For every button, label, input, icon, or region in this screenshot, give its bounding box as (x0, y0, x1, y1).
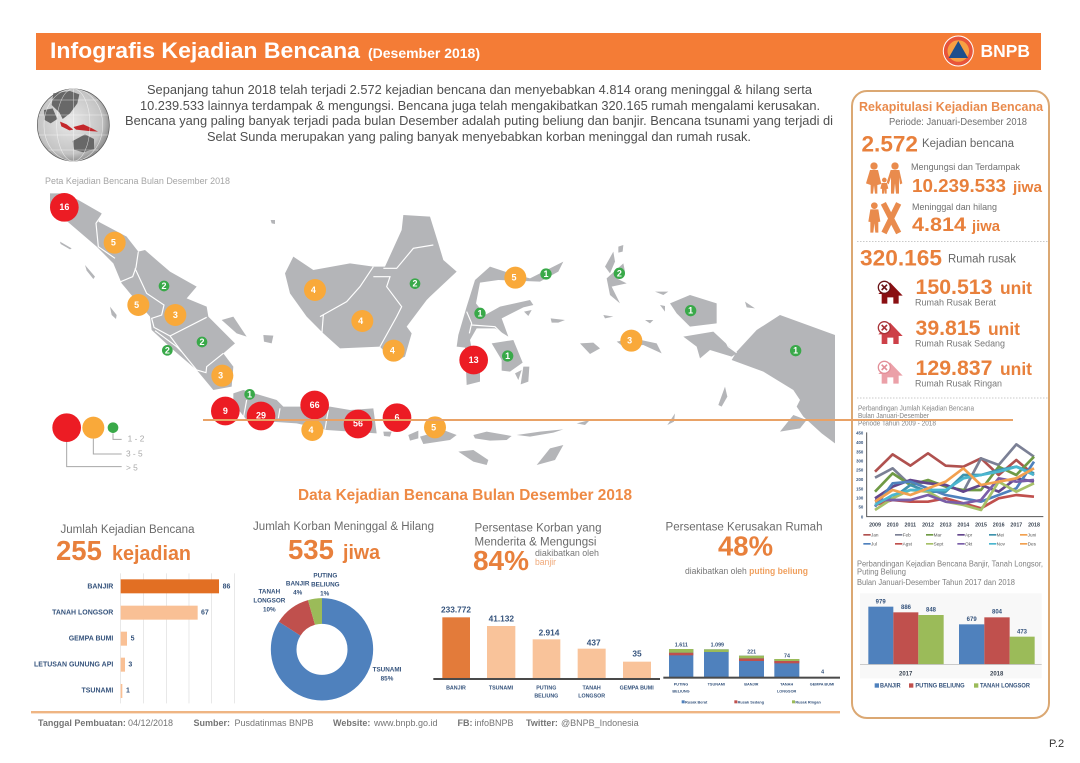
big number: jiwa (342, 542, 381, 564)
map markers west: 2 (199, 337, 204, 347)
donut chart: LONGSOR (253, 598, 286, 605)
panel: persentase korban (433, 522, 660, 699)
line chart: 2015 (975, 522, 987, 528)
moderate damage: Rumah Rusak Sedang (915, 338, 1005, 348)
map markers east: 1 (793, 346, 798, 356)
heading: Jumlah Korban Meninggal & Hilang (253, 521, 434, 533)
light damage: Rumah Rusak Ringan (915, 378, 1002, 388)
bar chart caption (857, 560, 1043, 587)
heavy damage: unit (1000, 278, 1032, 298)
moderate damage (915, 317, 1020, 348)
line chart legend: Juni (1028, 533, 1036, 538)
bar chart: TSUNAMI (82, 687, 113, 694)
footer rule and credits (31, 711, 840, 728)
bar chart: TANAH (583, 686, 601, 692)
map: Indonesia (50, 193, 835, 465)
bar chart: 67 (201, 610, 209, 617)
note (535, 548, 599, 567)
icon: light damage house (878, 361, 903, 384)
map markers west: 4 (358, 316, 363, 326)
line chart legend: Des (1028, 542, 1037, 547)
bar chart 2017 vs 2018: 2017 (899, 671, 913, 677)
stacked bar chart: PUTING (674, 682, 688, 686)
bar chart: GEMPA BUMI (69, 636, 113, 643)
line chart: 50 (859, 504, 864, 509)
map legend: > 5 (126, 462, 138, 472)
donut chart: 1% (320, 591, 330, 598)
footer rule and credits: @BNPB_Indonesia (561, 718, 639, 728)
displaced count (911, 162, 1043, 196)
line chart: 2013 (940, 522, 952, 528)
heavy damage (915, 276, 1032, 308)
footer rule and credits: Sumber: (194, 718, 230, 728)
line chart: 150 (856, 486, 864, 491)
line chart: 450 (856, 431, 864, 436)
bar chart: 2.914 (539, 627, 560, 637)
death count: Meninggal dan hilang (912, 202, 997, 213)
big number: 255 (56, 535, 102, 566)
bar chart: 35 (632, 648, 642, 658)
bar chart: GEMPA BUMI (620, 686, 654, 692)
heading (474, 522, 602, 548)
bar chart 2017 vs 2018: 679 (967, 617, 977, 623)
stacked bar chart (663, 642, 840, 704)
displaced count: jiwa (1012, 179, 1043, 196)
heading: Jumlah Kejadian Bencana (60, 524, 195, 536)
heading: Persentase Kerusakan Rumah (666, 522, 822, 534)
line chart legend: Jan (871, 533, 879, 538)
subtitle: (Desember 2018) (368, 45, 480, 61)
icon: globe (37, 89, 109, 161)
map markers west: 6 (394, 412, 399, 422)
map markers west: 66 (310, 400, 320, 410)
bar chart 2017 vs 2018: 848 (926, 608, 937, 614)
map markers east: 2 (617, 268, 622, 278)
stacked bar chart: 221 (747, 650, 756, 656)
line chart caption: Periode Tahun 2009 - 2018 (858, 420, 936, 428)
map markers west: 29 (256, 411, 266, 421)
icon: person and X (868, 202, 899, 233)
panel: kerusakan rumah (663, 522, 840, 704)
donut chart: TSUNAMI (373, 667, 402, 674)
line chart: 400 (856, 440, 864, 445)
bar chart (433, 604, 660, 699)
map markers west: 3 (218, 371, 223, 381)
line chart: 2016 (993, 522, 1005, 528)
line chart legend: Nov (997, 542, 1006, 547)
stacked bar chart: LONGSOR (777, 689, 797, 693)
map markers west: 1 (247, 389, 252, 399)
line chart legend: Feb (903, 533, 911, 538)
line chart: 350 (856, 449, 864, 454)
map markers west: 2 (165, 345, 170, 355)
stacked bar chart: BELIUNG (672, 689, 690, 693)
bar chart 2017 vs 2018 (860, 593, 1042, 690)
bar chart: 1 (126, 687, 130, 694)
map legend (52, 413, 145, 472)
intro paragraph: Bencana yang paling banyak terjadi pada bulan Desember adalah puting beliung dan banjir. Bencana tsunami yang terjadi di (125, 114, 833, 128)
panel: rekapitulasi (852, 91, 1049, 718)
stacked bar chart: 1.099 (711, 642, 724, 648)
intro paragraph (125, 83, 833, 144)
map markers west: 4 (308, 425, 313, 435)
bar chart 2017 vs 2018: 473 (1017, 630, 1028, 636)
damaged houses total: Rumah rusak (948, 254, 1016, 266)
donut chart: 10% (263, 607, 276, 614)
map markers east: 1 (477, 308, 482, 318)
stacked bar chart: BANJIR (744, 682, 759, 686)
line chart: 2018 (1028, 522, 1040, 528)
line chart caption (858, 406, 974, 428)
line chart: 2010 (887, 522, 899, 528)
title: Infografis Kejadian Bencana (50, 38, 360, 63)
stacked bar chart: Rusak Ringan (795, 700, 822, 704)
bar chart: 437 (587, 637, 601, 647)
icon: moderate damage house (878, 322, 903, 344)
stacked bar chart: 1.611 (675, 643, 688, 649)
light damage: unit (1000, 359, 1032, 379)
bar chart: 3 (128, 661, 132, 668)
line chart legend: Jul (871, 542, 877, 547)
total events (862, 132, 1015, 156)
map markers west: 5 (431, 422, 436, 432)
header banner (36, 33, 1041, 70)
stacked bar chart: Rusak Sedang (738, 700, 765, 704)
big number: kejadian (112, 543, 191, 565)
bar chart: BANJIR (446, 686, 466, 692)
bar chart caption: Bulan Januari-Desember Tahun 2017 dan 2018 (857, 578, 1016, 587)
map markers east: 5 (511, 273, 516, 283)
section heading: Data Kejadian Bencana Bulan Desember 2018 (298, 487, 632, 504)
note: diakibatkan oleh puting beliung (685, 566, 808, 576)
bar chart: LETUSAN GUNUNG API (34, 661, 113, 668)
map legend: 1 - 2 (128, 434, 145, 444)
heading: Menderita & Mengungsi (474, 536, 596, 548)
stacked bar chart: 4 (821, 669, 824, 675)
note: banjir (535, 557, 556, 567)
total events: 2.572 (862, 132, 918, 156)
line chart: 2009 (869, 522, 881, 528)
line chart legend (863, 533, 1037, 547)
map markers west: 2 (161, 281, 166, 291)
line chart: 250 (856, 468, 864, 473)
big number: 84% (473, 545, 529, 576)
intro paragraph: 10.239.533 lainnya terdampak & mengungsi. Bencana juga telah mengakibatkan 320.165 rumah mengalami kerusakan. (140, 99, 820, 113)
line chart caption: Perbandingan Jumlah Kejadian Bencana (858, 406, 974, 412)
page number: P.2 (1049, 738, 1064, 750)
death count (912, 202, 1001, 236)
moderate damage: unit (988, 319, 1020, 339)
stacked bar chart: Rusak Berat (685, 700, 708, 704)
stacked bar chart: TSUNAMI (708, 682, 725, 686)
footer rule and credits: Pusdatinmas BNPB (234, 718, 314, 728)
footer rule and credits: Website: (333, 718, 370, 728)
footer rule and credits: www.bnpb.go.id (373, 718, 438, 728)
heading: Persentase Korban yang (474, 522, 602, 534)
bar chart caption: Perbandingan Kejadian Bencana Banjir, Tanah Longsor, (857, 560, 1043, 568)
map markers west: 5 (134, 300, 139, 310)
big number: 48% (718, 530, 773, 562)
line chart: 2012 (922, 522, 934, 528)
line chart: 2014 (957, 522, 969, 528)
intro paragraph: Selat Sunda merupakan yang paling banyak menyebabkan korban meninggal dan rumah rusak. (207, 130, 751, 144)
map markers east: 1 (688, 306, 693, 316)
bar chart caption: Puting Beliung (857, 568, 906, 576)
bar chart: 233.772 (441, 604, 471, 614)
line chart: 200 (856, 477, 864, 482)
bar chart 2017 vs 2018: PUTING BELIUNG (915, 684, 965, 690)
map east: Sulawesi, Maluku, Papua (457, 245, 835, 465)
displaced count: 10.239.533 (912, 175, 1006, 196)
map markers west: 4 (311, 285, 316, 295)
line chart: 2017 (1010, 522, 1022, 528)
map markers east: 3 (627, 336, 632, 346)
line chart legend: Okt (965, 542, 973, 547)
note: diakibatkan oleh (535, 548, 599, 558)
icon: family (866, 162, 902, 194)
moderate damage: 39.815 (916, 317, 981, 340)
light damage (915, 357, 1032, 388)
line chart legend: Mei (997, 533, 1004, 538)
bar chart: 86 (223, 584, 231, 591)
donut chart: 85% (381, 676, 394, 683)
map markers west (50, 193, 446, 441)
footer rule and credits: FB: (458, 718, 472, 728)
donut chart: BANJIR (286, 580, 310, 587)
map markers east (459, 267, 801, 374)
panel: korban meninggal (253, 521, 434, 688)
map markers west: 16 (59, 202, 69, 212)
map west: Sumatra, Java, Kalimantan (50, 193, 457, 444)
damaged houses total: 320.165 (860, 246, 942, 270)
donut chart (253, 572, 402, 688)
map markers west: 2 (412, 279, 417, 289)
line chart: 100 (856, 495, 864, 500)
donut chart: BELIUNG (311, 582, 340, 589)
line chart legend: Mar (934, 533, 942, 538)
line chart: 2011 (905, 522, 916, 528)
donut chart: TANAH (258, 588, 281, 595)
bar chart 2017 vs 2018: 979 (876, 600, 886, 606)
bar chart: PUTING (536, 686, 556, 692)
bar chart 2017 vs 2018: TANAH LONGSOR (980, 684, 1031, 690)
map markers east: 1 (543, 269, 548, 279)
bar chart: 41.132 (489, 613, 514, 623)
line chart legend: Apr (965, 533, 973, 538)
logo text: BNPB (980, 41, 1030, 61)
map markers west: 3 (173, 310, 178, 320)
death count: jiwa (971, 218, 1001, 235)
map markers west: 9 (223, 406, 228, 416)
map caption: Peta Kejadian Bencana Bulan Desember 2018 (45, 176, 230, 186)
footer rule and credits: Tanggal Pembuatan: (38, 718, 126, 728)
big number: 535 (288, 534, 334, 565)
line chart (856, 431, 1043, 547)
bar chart: BANJIR (87, 584, 113, 591)
damaged houses total (860, 246, 1016, 270)
map markers west: 4 (390, 346, 395, 356)
map markers west: 56 (353, 419, 363, 429)
donut chart: PUTING (313, 572, 337, 579)
bar chart 2017 vs 2018: 2018 (990, 671, 1004, 677)
footer rule and credits: infoBNPB (474, 718, 514, 728)
map legend: 3 - 5 (126, 448, 143, 458)
icon: heavy damage house (878, 281, 903, 304)
line chart legend: Sept (934, 542, 944, 547)
icon: BNPB logo (943, 36, 974, 66)
intro paragraph: Sepanjang tahun 2018 telah terjadi 2.572 kejadian bencana dan menyebabkan 4.814 orang meninggal & hilang serta (147, 83, 812, 97)
footer rule and credits: 04/12/2018 (128, 718, 173, 728)
stacked bar chart: 74 (784, 653, 790, 659)
bar chart: TANAH LONGSOR (52, 610, 113, 617)
panel: jumlah kejadian (34, 524, 234, 703)
footer rule and credits: Twitter: (526, 718, 558, 728)
light damage: 129.837 (916, 357, 992, 380)
bar chart 2017 vs 2018: 886 (901, 605, 912, 611)
orange overlay line (203, 419, 1013, 421)
map markers east: 1 (505, 351, 510, 361)
bar chart: BELIUNG (534, 693, 558, 699)
map markers east: 13 (469, 355, 479, 365)
death count: 4.814 (912, 215, 966, 236)
heavy damage: Rumah Rusak Berat (915, 298, 996, 308)
bar chart: LONGSOR (578, 693, 605, 699)
total events: Kejadian bencana (922, 138, 1015, 150)
bar chart: TSUNAMI (489, 686, 514, 692)
line chart: 0 (861, 514, 864, 519)
stacked bar chart: GEMPA BUMI (810, 682, 834, 686)
bar chart: 5 (131, 636, 135, 643)
map markers west: 5 (111, 238, 116, 248)
line chart legend: Agst (903, 542, 913, 547)
panel heading: Rekapitulasi Kejadian Bencana (859, 99, 1044, 114)
line chart: 300 (856, 458, 864, 463)
heavy damage: 150.513 (916, 276, 993, 299)
stacked bar chart: TANAH (780, 682, 793, 686)
line chart caption: Bulan Januari-Desember (858, 413, 930, 420)
bar chart 2017 vs 2018: 804 (992, 610, 1003, 616)
displaced count: Mengungsi dan Terdampak (911, 162, 1020, 173)
period: Periode: Januari-Desember 2018 (889, 117, 1027, 128)
donut chart: 4% (293, 589, 303, 596)
bar chart 2017 vs 2018: BANJIR (880, 684, 901, 690)
bar chart (34, 573, 234, 703)
